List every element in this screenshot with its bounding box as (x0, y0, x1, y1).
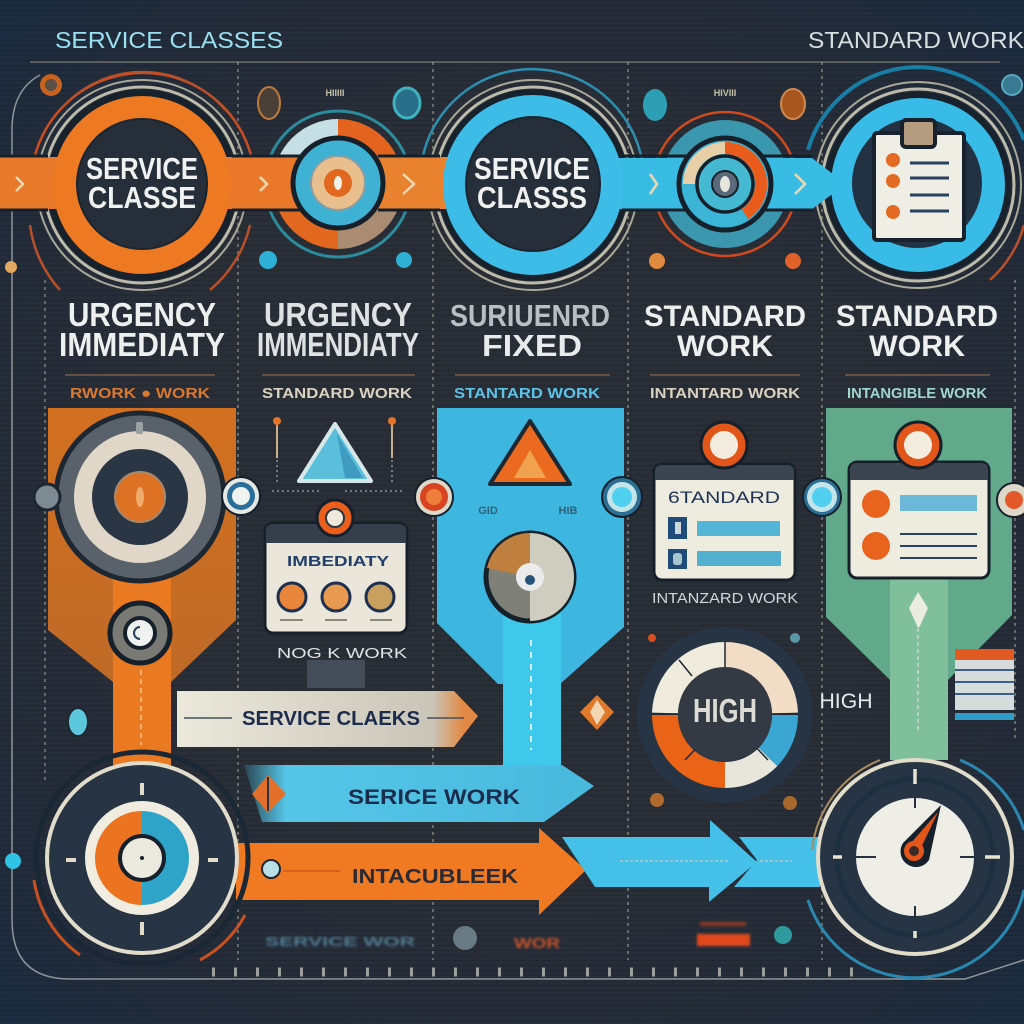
heading: standard work 1: WORK (677, 330, 773, 363)
header: service classes: SERVICE CLASSES (55, 27, 283, 53)
icon: orange service class circle: SERVICE (86, 151, 198, 186)
icon: orange gauge centre (293, 138, 383, 228)
card: immediaty: IMBEDIATY (287, 553, 389, 570)
vertical connector: blue (503, 610, 561, 765)
heading: urgency immediaty 1 (59, 296, 225, 363)
small panel tags (478, 505, 578, 517)
vertical connector: orange (113, 575, 171, 765)
icon: clipboard circle (812, 98, 1005, 272)
heading: urgency immediaty 1: URGENCY (68, 296, 216, 333)
subheadings: STANDARD WORK (262, 385, 412, 402)
heading: standard work 1 (644, 300, 806, 363)
icon: blue service class circle: CLASSS (477, 180, 587, 215)
heading: urgency immediaty 2: IMMENDIATY (257, 326, 419, 363)
vertical connector: green (890, 578, 948, 760)
icon: speedometer bottom-right (808, 760, 1024, 978)
subheadings: INTANTARD WORK (650, 385, 800, 402)
arrow: intacubleek (236, 828, 586, 915)
heading: urgency immediaty 2: URGENCY (264, 296, 412, 333)
top flow band (0, 156, 846, 210)
arrow: blue double (562, 820, 820, 902)
donut: high (637, 627, 813, 803)
icon: small diamond left (580, 695, 614, 730)
node icons row (34, 477, 1024, 517)
caption: intanzard work: INTANZARD WORK (652, 590, 798, 607)
arrow: intacubleek: INTACUBLEEK (352, 866, 519, 888)
arrow: service class: SERVICE CLAEKS (242, 708, 420, 730)
icon: mini table (955, 649, 1014, 720)
donut: high: HIGH (693, 692, 757, 729)
heading: urgency immediaty 1: IMMEDIATY (59, 326, 225, 363)
card: standard: 6TANDARD (668, 488, 780, 507)
card: standard list (849, 422, 989, 578)
tiny top labels: HIIIII (325, 88, 345, 98)
subheadings (65, 375, 990, 402)
rings: blue circle outer (422, 69, 642, 290)
subheadings: INTANGIBLE WORK (847, 385, 987, 402)
icon: blue panel dial (486, 533, 574, 621)
gauge segments: orange (265, 111, 411, 257)
rings: clipboard circle outer (808, 67, 1024, 288)
label: high: HIGH (820, 690, 872, 713)
tiny top labels (325, 88, 736, 98)
arrow: service work: SERICE WORK (348, 786, 520, 809)
heading: standard work 1: STANDARD (644, 300, 806, 333)
heading: fixed (450, 298, 610, 363)
card: standard (654, 422, 795, 580)
icon: orange service class circle: CLASSE (88, 180, 196, 215)
footer labels: SERVICE WOR (265, 934, 416, 949)
icon: diamond service (252, 775, 286, 813)
icon: blue gauge centre (679, 138, 771, 230)
icon: blue warning triangle (272, 417, 405, 491)
icon: blue service class circle: SERVICE (474, 151, 590, 186)
icon: hub orange (110, 603, 170, 663)
panel: blue pennant (437, 408, 624, 684)
footer labels: WOR (514, 935, 560, 952)
heading: fixed: SURIUENRD (450, 298, 610, 333)
rings: orange circle outer (30, 72, 254, 290)
arrow: service work (244, 765, 594, 822)
heading: standard work 2: STANDARD (836, 300, 998, 333)
arrow: service class (177, 691, 478, 747)
small panel tags: GID (478, 505, 498, 517)
icon: orange service class circle (53, 96, 231, 274)
card: immediaty (265, 500, 407, 633)
heading: urgency immediaty 2 (257, 296, 419, 363)
tiny top labels: HIVIII (714, 88, 736, 98)
heading: standard work 2: WORK (869, 330, 965, 363)
icon: blue service class circle (443, 95, 623, 275)
subheadings: RWORK ● WORK (70, 385, 210, 402)
connector base block (307, 660, 365, 688)
panel: green pennant (826, 408, 1012, 680)
icon: pie dial bottom-left (34, 752, 248, 964)
heading: standard work 2 (836, 300, 998, 363)
caption: hog work: NOG K WORK (277, 645, 407, 662)
header: standard work: STANDARD WORK (808, 27, 1024, 53)
heading: fixed: FIXED (482, 328, 582, 363)
footer labels (265, 922, 750, 952)
small panel tags: HIB (559, 505, 578, 517)
panel: orange pennant (48, 408, 236, 682)
icon: orange warning triangle (490, 421, 570, 484)
subheadings: STANTARD WORK (454, 385, 600, 402)
gauge segments: blue (653, 112, 797, 256)
icon: large dial orange panel (56, 413, 224, 581)
